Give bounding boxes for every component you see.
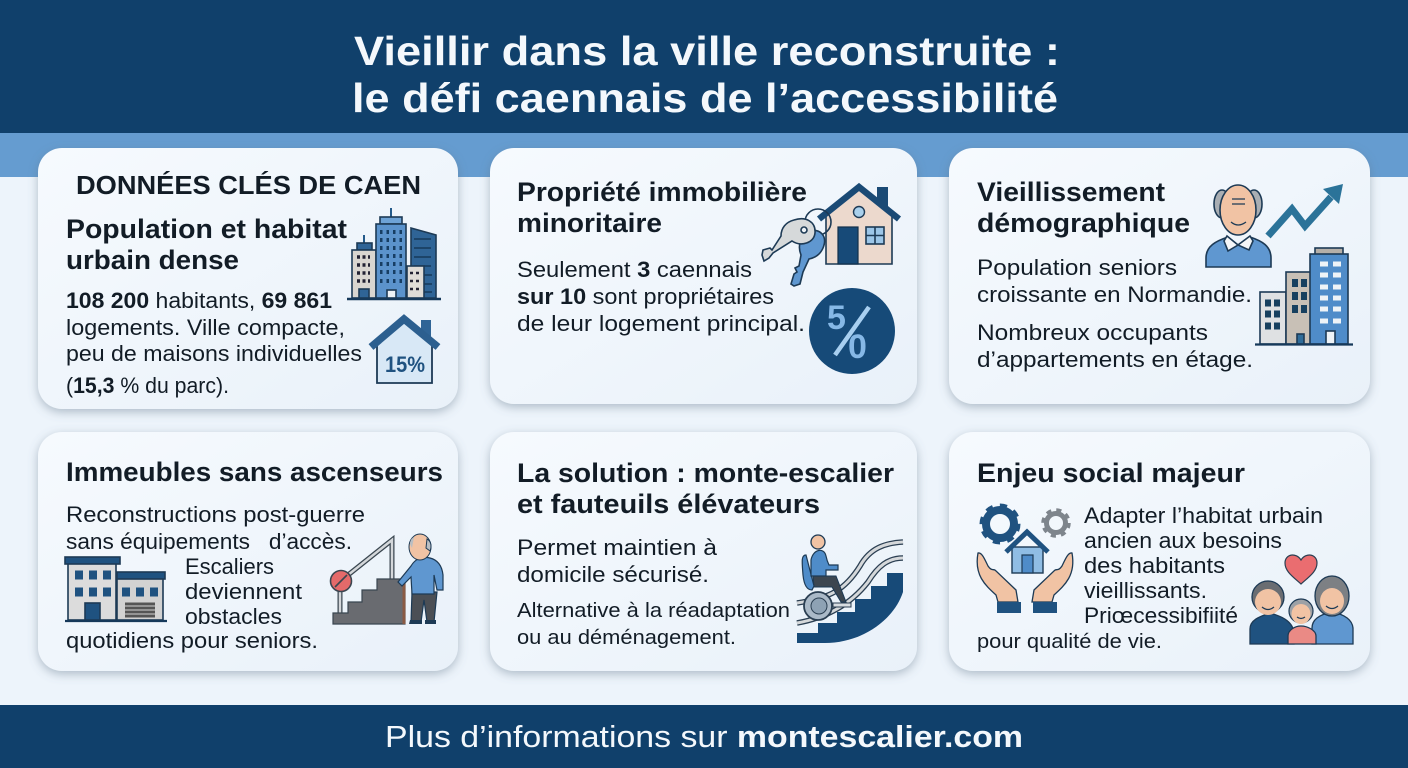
text block: Alternative à la réadaptation xyxy=(517,599,790,622)
icon: gears, house and hands xyxy=(977,506,1073,613)
panel heading: DONNÉES CLÉS DE CAEN xyxy=(76,170,421,200)
text block: ancien aux besoins xyxy=(1084,528,1282,553)
card background xyxy=(949,432,1370,671)
panel heading xyxy=(977,177,1190,238)
text block: quotidiens pour seniors. xyxy=(66,628,318,653)
icon: house xyxy=(819,187,899,264)
panel: vieillissement démographique xyxy=(949,148,1370,404)
text block: Seulement 3 caennais xyxy=(517,257,752,282)
text block: d’appartements en étage. xyxy=(977,347,1253,372)
text block: sans équipements d’accès. xyxy=(66,529,352,554)
text block: de leur logement principal. xyxy=(517,311,805,336)
icon: keys xyxy=(762,209,831,286)
text block: logements. Ville compacte, xyxy=(66,315,345,340)
card background xyxy=(490,148,917,404)
panel heading: et fauteuils élévateurs xyxy=(517,489,820,519)
icon: 5/0 badge: 0 xyxy=(848,328,867,366)
text block: obstacles xyxy=(185,604,282,629)
text block: peu de maisons individuelles xyxy=(66,341,362,366)
text block: 108 200 habitants, 69 861 xyxy=(66,288,332,313)
text block: ou au déménagement. xyxy=(517,626,736,649)
header band xyxy=(0,0,1408,177)
footer text: Plus d’informations sur montescalier.com xyxy=(385,719,1023,754)
icon: senior facing stairs xyxy=(330,534,443,624)
text block: Adapter l’habitat urbain xyxy=(1084,503,1323,528)
footer band xyxy=(0,705,1408,768)
title: le défi caennais de l’accessibilité xyxy=(352,75,1058,121)
text block: domicile sécurisé. xyxy=(517,562,709,587)
panel heading: Enjeu social majeur xyxy=(977,458,1246,488)
text block xyxy=(977,255,1253,372)
sub-heading xyxy=(66,214,347,275)
text block: Population seniors xyxy=(977,255,1177,280)
panel: données clés de Caen xyxy=(38,148,458,409)
title xyxy=(352,28,1060,121)
card background xyxy=(490,432,917,671)
text block: sur 10 sont propriétaires xyxy=(517,284,774,309)
text block xyxy=(517,257,805,336)
panel heading: minoritaire xyxy=(517,208,662,238)
icon: 5/0 badge: 5 xyxy=(827,299,846,337)
text block xyxy=(66,288,362,398)
text block: Permet maintien à xyxy=(517,535,718,560)
icon: stairlift xyxy=(797,535,903,643)
sub-heading: urbain dense xyxy=(66,245,239,275)
panel: enjeu social majeur xyxy=(949,432,1370,671)
icon: city buildings xyxy=(347,208,441,299)
panel: la solution xyxy=(490,432,917,671)
icon: senior man xyxy=(1206,185,1271,267)
icon: house 15%: 15% xyxy=(385,352,425,377)
text block: Reconstructions post-guerre xyxy=(66,502,365,527)
text block xyxy=(517,535,790,649)
panel heading: Vieillissement xyxy=(977,177,1165,207)
title: Vieillir dans la ville reconstruite : xyxy=(354,28,1060,74)
panel heading: La solution : monte-escalier xyxy=(517,458,895,488)
text block: Escaliers xyxy=(185,554,274,579)
panel: immeubles sans ascenseurs xyxy=(38,432,458,671)
icon: rising arrow xyxy=(1268,184,1343,236)
text block: pour qualité de vie. xyxy=(977,630,1162,653)
text block: (15,3 % du parc). xyxy=(66,373,229,398)
icon: house 15% xyxy=(371,319,438,383)
text block: vieillissants. xyxy=(1084,578,1207,603)
icon: family and heart xyxy=(1250,555,1353,644)
icon: post-war buildings xyxy=(65,557,167,621)
icon: 5/0 badge xyxy=(809,288,895,374)
panel heading: Propriété immobilière xyxy=(517,177,807,207)
icon: apartment buildings xyxy=(1255,248,1353,344)
text block: Priœcessibifiité xyxy=(1084,603,1238,628)
text block: Nombreux occupants xyxy=(977,320,1208,345)
text block: des habitants xyxy=(1084,553,1225,578)
panel heading xyxy=(517,458,895,519)
card background xyxy=(949,148,1370,404)
card background xyxy=(38,148,458,409)
panel heading: Immeubles sans ascenseurs xyxy=(66,457,443,487)
panel heading xyxy=(517,177,807,238)
text block xyxy=(977,503,1323,653)
text block: croissante en Normandie. xyxy=(977,282,1252,307)
sub-heading: Population et habitat xyxy=(66,214,347,244)
card background xyxy=(38,432,458,671)
panel heading: démographique xyxy=(977,208,1190,238)
panel: propriété immobilière xyxy=(490,148,917,404)
text block: deviennent xyxy=(185,579,303,604)
text block xyxy=(66,502,365,653)
